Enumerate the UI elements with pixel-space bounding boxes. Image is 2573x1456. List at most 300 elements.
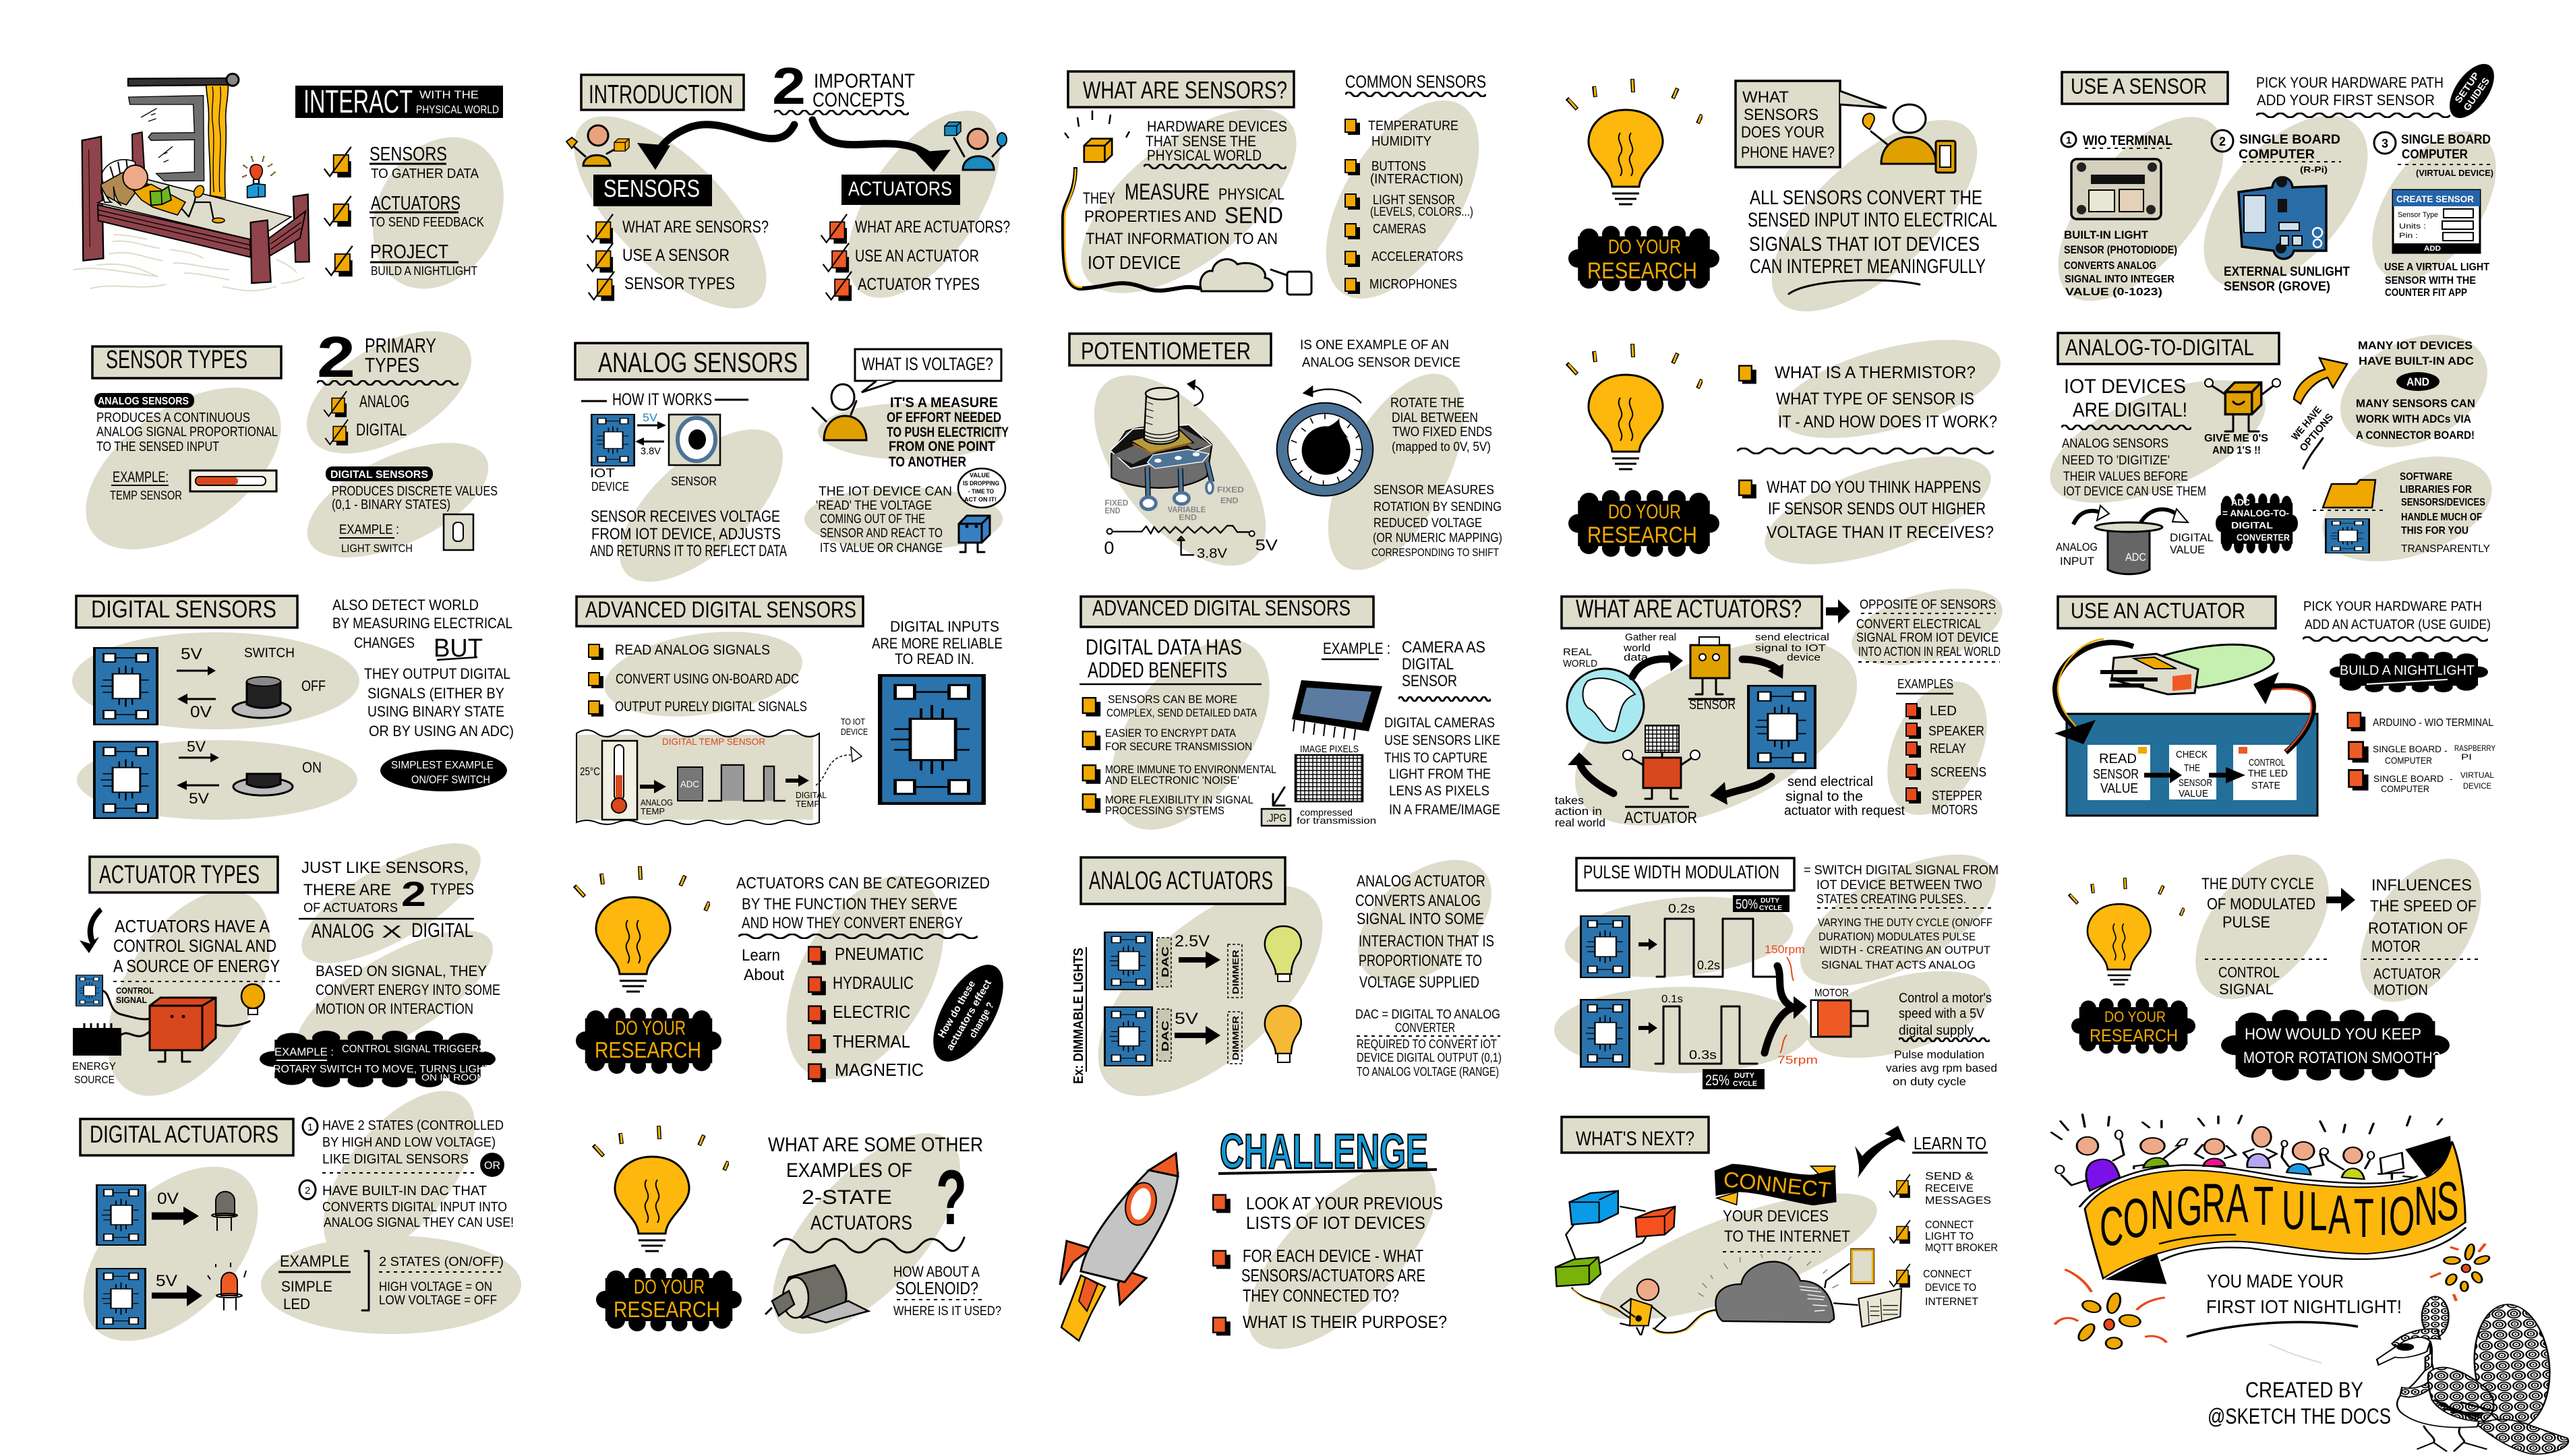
text: solenoid: HOW ABOUT A <box>893 1263 980 1280</box>
icon: light bulb <box>1567 344 1702 469</box>
list: actuator examples: STEPPER <box>1932 789 1982 803</box>
text: just like sensors: X <box>382 921 402 942</box>
diagram: bright light at 5V <box>1104 1006 1301 1066</box>
list: actuator topics <box>821 214 1010 301</box>
column: single board computer virtual device: USE A VIRTUAL LIGHT <box>2384 262 2489 273</box>
text: built-in dac <box>299 1180 514 1230</box>
list: next steps: DEVICE TO <box>1925 1282 1976 1294</box>
diagram: actuator loop: send electrical <box>1755 632 1829 643</box>
text: iot device reads voltage: COMING OUT OF THE <box>820 512 925 526</box>
callout: do your research <box>576 1008 721 1074</box>
column: single board computer virtual device: CREATE SENSOR <box>2396 193 2474 204</box>
speech box: what is voltage <box>855 349 1001 392</box>
heading: learn to: LEARN TO <box>1914 1133 1986 1153</box>
diagram: actuator with signal and energy: SIGNAL <box>116 995 147 1005</box>
title: challenge: CHALLENGE <box>1220 1125 1428 1179</box>
heading: 2 important concepts <box>772 57 915 115</box>
diagram: actuator loop: world <box>1623 642 1651 654</box>
text: digital cameras: THIS TO CAPTURE <box>1384 750 1487 766</box>
arrow: we have options: WE HAVE <box>2289 404 2324 443</box>
text: just like sensors: DIGITAL <box>411 919 473 942</box>
text: 2-state question: ? <box>936 1155 967 1241</box>
text: digital sensors definition: DIGITAL SENSORS <box>330 469 428 481</box>
callout: value is dropping: VALUE <box>970 472 990 479</box>
text: duty cycle: THE DUTY CYCLE <box>2201 875 2314 893</box>
diagram: actuator loop: signal to the <box>1785 789 1863 804</box>
list: next steps: CONNECT <box>1925 1219 1974 1231</box>
text: control motor speed: digital supply <box>1899 1023 1974 1038</box>
banner: connect <box>1 0 1837 1205</box>
text: analog sensors definition <box>94 393 278 454</box>
text: also detect world: BY MEASURING ELECTRICAL <box>332 615 512 632</box>
text: also detect world: OR BY USING AN ADC) <box>369 723 514 739</box>
badge: setup guides <box>2441 57 2503 125</box>
list: lesson topics: PROJECT <box>370 241 448 263</box>
heading: digital data benefits: DIGITAL DATA HAS <box>1086 635 1242 659</box>
text: opposite of sensors: INTO ACTION IN REAL WORLD <box>1858 645 2001 659</box>
label and arrow: to iot device: TO IOT <box>841 717 865 727</box>
label: learn about: Learn <box>742 946 780 965</box>
text: analog sensors need digitize: IOT DEVICE CAN USE THEM <box>2063 485 2206 499</box>
diagram: digital temp sensor: DIGITAL <box>796 790 827 800</box>
text: sensor measures rotation: (OR NUMERIC MAPPING) <box>1373 531 1502 545</box>
list: next steps: SEND & <box>1925 1171 1974 1182</box>
list: actuator paths: ARDUINO - WIO TERMINAL <box>2373 717 2493 729</box>
text: opposite of sensors: CONVERT ELECTRICAL <box>1856 617 1981 632</box>
panel: analog to digital <box>2034 312 2506 581</box>
speech box: phone sensors question: DOES YOUR <box>1741 123 1825 142</box>
callout: do your research: RESEARCH <box>1587 258 1697 284</box>
diagram: switch off <box>94 645 326 725</box>
text: pwm definition: WIDTH - CREATING AN OUTPUT <box>1820 944 1990 957</box>
text: also detect world: CHANGES <box>354 634 415 651</box>
text: just like sensors: OF ACTUATORS <box>303 901 398 915</box>
title: analog actuators <box>1081 857 1285 904</box>
diagram: digital temp sensor: 25°C <box>580 765 600 778</box>
diagram: program flow: READ <box>2099 752 2137 766</box>
example: camera as digital sensor <box>1322 638 1491 701</box>
diagram: actuator loop: actuator with request <box>1784 803 1905 818</box>
heading: digital data benefits <box>1080 635 1262 684</box>
example: simple led: SIMPLE <box>281 1278 332 1295</box>
callout: how do these actuators effect change: How do these <box>936 979 978 1040</box>
callout: adc definition: DIGITAL <box>2231 520 2273 530</box>
illustration: potentiometer device and dial <box>1104 380 1373 561</box>
callout: example control signal: CONTROL SIGNAL TRIGGERS <box>342 1043 485 1055</box>
text: analog sensors need digitize <box>2062 437 2206 499</box>
diagram: iot device and sensor circuit: 3.8V <box>641 446 661 457</box>
panel: actuator types <box>72 820 511 1124</box>
list: actuator categories: HYDRAULIC <box>833 973 914 993</box>
text: also detect world: ALSO DETECT WORLD <box>332 597 479 613</box>
text: built-in dac: ANALOG SIGNAL THEY CAN USE! <box>324 1215 514 1230</box>
list: actuator examples: SCREENS <box>1930 765 1986 780</box>
text: rotate the dial: ROTATE THE <box>1390 396 1465 411</box>
text: sensors convert input: ALL SENSORS CONVERT THE <box>1750 187 1982 209</box>
icon: large board <box>880 675 984 803</box>
diagram: digital temp sensor: TEMP <box>796 799 820 809</box>
example: camera as digital sensor: CAMERA AS <box>1402 638 1485 657</box>
list: next steps: RECEIVE <box>1925 1183 1974 1194</box>
heading: common sensors <box>1345 71 1486 96</box>
text: iot device reads voltage: THE IOT DEVICE CAN <box>819 485 952 499</box>
example: camera as digital sensor: DIGITAL <box>1402 655 1454 673</box>
text: analog actuator definition: ANALOG ACTUATOR <box>1357 872 1485 890</box>
banner: congratulations <box>2080 1136 2465 1284</box>
icon: board character <box>959 516 990 552</box>
text: rotate the dial <box>1390 396 1492 454</box>
text: analog sensors need digitize: ANALOG SENSORS <box>2062 437 2168 451</box>
text: measure and send <box>1083 179 1284 273</box>
text: analog sensors definition: ANALOG SIGNAL PROPORTIONAL <box>96 425 278 439</box>
list: analog and digital: ANALOG <box>359 392 409 411</box>
diagram: program flow: SENSOR <box>2093 767 2139 782</box>
text: many iot devices have adc: WORK WITH ADCs VIA <box>2356 413 2471 425</box>
text: analog sensors need digitize: NEED TO 'DIGITIZE' <box>2062 454 2170 468</box>
text: based on signal: BASED ON SIGNAL, THEY <box>316 963 487 979</box>
list: actuator paths: COMPUTER <box>2381 783 2429 794</box>
illustration: potentiometer device and dial: FIXED <box>1217 485 1244 495</box>
text: built-in dac: HAVE BUILT-IN DAC THAT <box>322 1184 487 1199</box>
text: dac definition: DAC = DIGITAL TO ANALOG <box>1355 1008 1500 1022</box>
list: common sensors: HUMIDITY <box>1371 134 1431 149</box>
column: wio terminal: WIO TERMINAL <box>2083 133 2172 148</box>
diagram: bright light at 5V: 5V <box>1175 1010 1198 1028</box>
list: challenge tasks: WHAT IS THEIR PURPOSE? <box>1243 1312 1447 1332</box>
heading: iot devices are digital: IOT DEVICES <box>2064 375 2186 398</box>
list: actuator topics: USE AN ACTUATOR <box>855 247 979 266</box>
banner: connect: CONNECT <box>1722 1167 1832 1203</box>
diagram: actuator loop: REAL <box>1563 646 1592 658</box>
diagram: adc hat <box>2056 506 2214 574</box>
icon: light bulb <box>574 866 709 992</box>
column: single board computer raspberry pi: SENSOR (GROVE) <box>2224 280 2330 294</box>
diagram: actuator loop: Gather real <box>1625 632 1676 643</box>
list: actuator paths: RASPBERRY <box>2454 744 2495 753</box>
list: benefits: PROCESSING SYSTEMS <box>1105 804 1224 817</box>
text: voltage definition <box>887 395 1009 470</box>
column: single board computer virtual device: COUNTER FIT APP <box>2385 287 2467 299</box>
text: dac definition: TO ANALOG VOLTAGE (RANGE) <box>1357 1065 1499 1079</box>
diagram: actuator loop: data <box>1624 652 1649 663</box>
list: actuator paths: COMPUTER <box>2385 755 2432 766</box>
illustration: potentiometer device and dial: END <box>1104 506 1121 516</box>
heading: 2 important concepts: IMPORTANT <box>814 70 915 92</box>
callout: do your research: RESEARCH <box>1587 522 1697 548</box>
text: you made your first iot nightlight: YOU MADE YOUR <box>2207 1271 2344 1292</box>
label: learn about <box>742 946 784 984</box>
text: 2-state question <box>768 1134 983 1252</box>
example: simple led: 2 STATES (ON/OFF) <box>379 1255 504 1269</box>
icon: software folder <box>2313 480 2384 510</box>
illustration: cheering crowd <box>2051 1114 2442 1191</box>
text: sensors convert input <box>1748 187 1997 294</box>
list: sensor topics <box>587 214 769 301</box>
text: pwm definition: IOT DEVICE BETWEEN TWO <box>1816 878 1982 892</box>
list: lesson topics: SENSORS <box>369 144 447 165</box>
list: benefits: FOR SECURE TRANSMISSION <box>1105 740 1252 753</box>
list: challenge tasks: THEY CONNECTED TO? <box>1243 1285 1399 1306</box>
callout: example control signal <box>260 1031 496 1087</box>
text: 2-state question: 2-STATE <box>802 1186 892 1209</box>
callout: keep rotation smooth: HOW WOULD YOU KEEP <box>2245 1025 2421 1043</box>
diagram: led on at 5V: 5V <box>156 1272 177 1290</box>
chart: 50 percent duty cycle: 50% <box>1736 897 1758 912</box>
column: single board computer virtual device: Sensor Type <box>2398 211 2438 219</box>
column: single board computer virtual device: (VIRTUAL DEVICE) <box>2416 168 2493 178</box>
text: sensor measures rotation: ROTATION BY SENDING <box>1373 500 1502 514</box>
text: dac definition: CONVERTER <box>1395 1021 1455 1035</box>
list: benefits: MORE FLEXIBILITY IN SIGNAL <box>1105 793 1253 806</box>
callout: simplest example: ON/OFF SWITCH <box>411 773 490 786</box>
text: just like sensors: ANALOG <box>312 920 374 942</box>
text: duty cycle: OF MODULATED <box>2207 895 2315 913</box>
callout: value is dropping: - TIME TO <box>968 488 994 495</box>
text: control motor speed <box>1886 991 1997 1088</box>
text: your devices: TO THE INTERNET <box>1724 1227 1850 1246</box>
callout: example control signal: ROTARY SWITCH TO MOVE, TURNS LIGHT <box>273 1064 491 1075</box>
title: pulse width modulation: PULSE WIDTH MODULATION <box>1583 861 1779 882</box>
text: definition: THAT SENSE THE <box>1146 133 1256 150</box>
list: challenge tasks: SENSORS/ACTUATORS ARE <box>1241 1265 1425 1285</box>
diagram: actuator loop: device <box>1787 652 1821 663</box>
text: pwm definition: DURATION) MODULATES PULSE <box>1818 930 1976 943</box>
title: digital actuators: DIGITAL ACTUATORS <box>90 1120 278 1148</box>
diagram: actuator loop: action in <box>1555 805 1602 818</box>
title: interact: INTERACT <box>303 84 413 120</box>
text: also detect world <box>332 597 514 739</box>
column: wio terminal: CONVERTS ANALOG <box>2064 260 2156 272</box>
text: voltage definition: TO PUSH ELECTRICITY <box>887 425 1009 440</box>
illustration: potentiometer device and dial: END <box>1179 513 1197 522</box>
text: measure and send: PHYSICAL <box>1218 185 1284 204</box>
diagram: iot device and sensor circuit: DEVICE <box>591 480 629 493</box>
text: many iot devices have adc: MANY SENSORS CAN <box>2356 397 2475 410</box>
list: next steps: CONNECT <box>1923 1269 1972 1280</box>
text: also detect world: USING BINARY STATE <box>367 703 504 720</box>
list: common sensors: (INTERACTION) <box>1370 172 1463 187</box>
title: analog sensors <box>575 343 808 380</box>
text: duty cycle: SIGNAL <box>2219 981 2274 998</box>
list: analog and digital: DIGITAL <box>356 421 407 439</box>
text: sensors convert input: SIGNALS THAT IOT DEVICES <box>1749 233 1980 255</box>
icon: small board <box>2326 519 2369 553</box>
list: lesson topics <box>324 144 485 278</box>
decoration: right confetti flower <box>2430 1244 2491 1301</box>
text: rotate the dial: TWO FIXED ENDS <box>1392 425 1492 439</box>
diagram: actuator loop: ACTUATOR <box>1624 809 1697 827</box>
title: potentiometer: POTENTIOMETER <box>1081 337 1251 365</box>
diagram: program flow: CONTROL <box>2249 757 2285 768</box>
text: digital inputs reliable: ARE MORE RELIABLE <box>872 635 1003 652</box>
callout: do your research <box>1568 490 1719 557</box>
panel: challenge <box>1060 1125 1466 1379</box>
callout: adc definition <box>2216 493 2298 553</box>
text: analog actuator definition: INTERACTION THAT IS <box>1359 932 1494 950</box>
text: control signal and energy <box>113 916 283 981</box>
text: digital sensors definition <box>326 466 498 555</box>
diagram: dim light at 2.5V: 2.5V <box>1175 932 1210 950</box>
diagram: iot device and sensor circuit: IOT <box>590 466 615 480</box>
diagram: actuator with signal and energy: CONTROL <box>116 985 154 996</box>
text: duty cycle: CONTROL <box>2218 964 2280 981</box>
callout: do your research: DO YOUR <box>615 1017 686 1039</box>
panel: digital sensors <box>72 595 514 820</box>
text: influences speed: MOTION <box>2373 981 2428 998</box>
text: sensor receives voltage: SENSOR RECEIVES VOLTAGE <box>591 508 780 526</box>
text: solenoid: SOLENOID? <box>895 1278 978 1298</box>
text: analog actuator definition: SIGNAL INTO SOME <box>1357 910 1484 928</box>
callout: adc definition: CONVERTER <box>2237 532 2290 543</box>
heading: 2 important concepts: 2 <box>772 57 806 115</box>
list: analog and digital <box>324 391 409 446</box>
list: actuator paths: SINGLE BOARD <box>2373 744 2442 754</box>
list: lesson topics: ACTUATORS <box>371 193 461 214</box>
text: software libraries <box>2400 471 2490 555</box>
text: control motor speed: varies avg rpm based <box>1886 1062 1997 1074</box>
illustration: potentiometer device and dial: VARIABLE <box>1168 505 1206 514</box>
heading: pick hardware path: ADD YOUR FIRST SENSOR <box>2257 92 2435 109</box>
list: actuator examples: EXAMPLES <box>1897 677 1953 692</box>
text: analog actuator definition: PROPORTIONATE TO <box>1359 952 1482 970</box>
text: pwm definition: = SWITCH DIGITAL SIGNAL FROM <box>1804 863 1999 878</box>
diagram: program flow: SENSOR <box>2179 777 2212 789</box>
title: what are sensors <box>1068 71 1294 107</box>
text: software libraries: LIBRARIES FOR <box>2400 484 2472 495</box>
panel: do your research phone sensors <box>1567 79 2008 344</box>
list: common sensors <box>1345 119 1473 294</box>
text: rotate the dial: DIAL BETWEEN <box>1392 411 1478 425</box>
question: thermistor <box>1739 363 1997 431</box>
text: measure and send: SEND <box>1224 203 1283 229</box>
diagram: digital temp sensor: TEMP <box>641 806 665 816</box>
text: two state actuators: HAVE 2 STATES (CONTROLLED <box>322 1118 504 1133</box>
illustration: nightlight <box>2100 644 2274 694</box>
list: actuator categories <box>808 944 924 1082</box>
text: measure and send: MEASURE <box>1125 179 1210 205</box>
column: single board computer virtual device: SENSOR WITH THE <box>2385 275 2476 286</box>
text: influences speed: THE SPEED OF <box>2370 897 2477 915</box>
diagram: dim light at 2.5V: DAC <box>1160 946 1171 977</box>
list: actuator paths: - <box>2444 745 2448 756</box>
text: control signal and energy: ACTUATORS HAVE A <box>115 916 270 936</box>
text: pwm definition: SIGNAL THAT ACTS ANALOG <box>1821 959 1976 971</box>
heading: 2 primary types <box>317 326 459 390</box>
list: actuator examples <box>1896 677 1986 818</box>
text: sensor measures rotation <box>1371 483 1502 559</box>
text: solenoid <box>893 1263 1001 1318</box>
text: analog sensors definition: TO THE SENSED INPUT <box>96 439 219 454</box>
column: single board computer raspberry pi: 2 <box>2219 135 2226 148</box>
text: two state actuators: LIKE DIGITAL SENSORS <box>322 1152 469 1167</box>
column: wio terminal: BUILT-IN LIGHT <box>2064 229 2149 241</box>
text: two state actuators: 1 <box>307 1122 313 1133</box>
title: analog-to-digital: ANALOG-TO-DIGITAL <box>2065 335 2254 361</box>
column: single board computer raspberry pi: COMPUTER <box>2239 148 2315 162</box>
text: control signal and energy: CONTROL SIGNAL AND <box>113 936 276 956</box>
text: control motor speed: Control a motor's <box>1899 991 1992 1006</box>
list: actuator categories: MAGNETIC <box>835 1060 924 1080</box>
panel: interact with the physical world <box>73 73 529 311</box>
speech box: what is voltage: WHAT IS VOLTAGE? <box>862 354 993 374</box>
list: sensor topics: USE A SENSOR <box>622 246 730 265</box>
chart: 50 percent duty cycle <box>1580 895 1790 977</box>
illustration: image sensor chip and pixels: IMAGE PIXELS <box>1300 744 1359 755</box>
chart: 25 percent duty cycle <box>1580 994 1765 1089</box>
text: digital sensors definition: (0,1 - BINARY STATES) <box>332 497 450 512</box>
column: single board computer virtual device <box>2374 132 2493 299</box>
heading: iot devices are digital: ARE DIGITAL! <box>2073 399 2187 421</box>
text: measure and send: THEY <box>1083 189 1115 208</box>
text: duty cycle: PULSE <box>2222 913 2270 932</box>
panel: what's next <box>1 0 1998 1345</box>
title: sensor types: SENSOR TYPES <box>106 346 247 374</box>
text: analog sensors definition: ANALOG SENSORS <box>98 396 189 407</box>
heading: pick hardware path: ADD AN ACTUATOR (USE GUIDE) <box>2305 617 2491 632</box>
example: temp sensor: TEMP SENSOR <box>110 489 182 502</box>
text: just like sensors <box>299 859 474 942</box>
title: interact: PHYSICAL WORLD <box>416 103 499 116</box>
label: actuators <box>841 175 960 205</box>
text: control motor speed: Pulse modulation <box>1894 1048 1984 1061</box>
column: single board computer raspberry pi: (R-Pi) <box>2300 164 2328 175</box>
illustration: image sensor chip and pixels: .JPG <box>1266 812 1286 824</box>
diagram: actuator loop: takes <box>1555 794 1584 807</box>
text: sensors convert input: CAN INTEPRET MEANINGFULLY <box>1750 255 1986 278</box>
list: actuator paths: PI <box>2461 752 2472 762</box>
text: pwm definition: STATES CREATING PULSES. <box>1816 892 1966 907</box>
illustration: potentiometer device and dial: END <box>1220 496 1239 506</box>
heading: 2 primary types: PRIMARY <box>365 334 436 357</box>
list: benefits: AND ELECTRONIC 'NOISE' <box>1105 774 1239 787</box>
list: actuator paths: VIRTUAL <box>2460 770 2494 780</box>
diagram: program flow <box>2067 714 2317 816</box>
text: definition: HARDWARE DEVICES <box>1147 118 1287 135</box>
list: challenge tasks: LOOK AT YOUR PREVIOUS <box>1246 1193 1443 1213</box>
callout: value is dropping: ACT ON IT! <box>964 496 997 503</box>
diagram: program flow: VALUE <box>2179 788 2208 799</box>
text: iot device reads voltage <box>816 485 952 555</box>
text: just like sensors: 2 <box>401 875 426 914</box>
text: intro: IS ONE EXAMPLE OF AN <box>1300 338 1449 353</box>
diagram: iot device and sensor circuit: SENSOR <box>671 475 717 488</box>
panel: sensor types <box>57 306 505 582</box>
arrows: signals into motor: 150rpm <box>1765 943 1805 956</box>
list: actuator topics: WHAT ARE ACTUATORS? <box>855 218 1010 237</box>
example: simple led: HIGH VOLTAGE = ON <box>379 1280 492 1294</box>
example: simple led: LED <box>283 1296 310 1312</box>
callout: do your research: DO YOUR <box>634 1276 705 1298</box>
text: built-in dac: CONVERTS DIGITAL INPUT INTO <box>322 1200 507 1215</box>
column: wio terminal: SIGNAL INTO INTEGER <box>2065 274 2175 285</box>
list: actuator topics: ACTUATOR TYPES <box>858 275 980 294</box>
callout: example control signal: EXAMPLE : <box>274 1045 334 1058</box>
arrow: to actuators <box>812 120 951 172</box>
text: digital cameras <box>1384 715 1500 818</box>
icon: motor <box>1811 988 1868 1037</box>
title: what's next: WHAT'S NEXT? <box>1576 1128 1694 1150</box>
example: simple led <box>278 1251 504 1312</box>
callout: how do these actuators effect change: actuators effect <box>944 978 994 1052</box>
title: pulse width modulation <box>1576 858 1794 890</box>
text: just like sensors: JUST LIKE SENSORS, <box>301 859 469 877</box>
icon: motor: MOTOR <box>1814 988 1849 999</box>
panel: congratulations <box>2051 1114 2568 1454</box>
question: thermistor: WHAT TYPE OF SENSOR IS <box>1776 390 1974 408</box>
list: actuator categories: PNEUMATIC <box>835 944 924 964</box>
text: also detect world: SIGNALS (EITHER BY <box>367 685 504 702</box>
title: what are sensors: WHAT ARE SENSORS? <box>1083 76 1287 104</box>
